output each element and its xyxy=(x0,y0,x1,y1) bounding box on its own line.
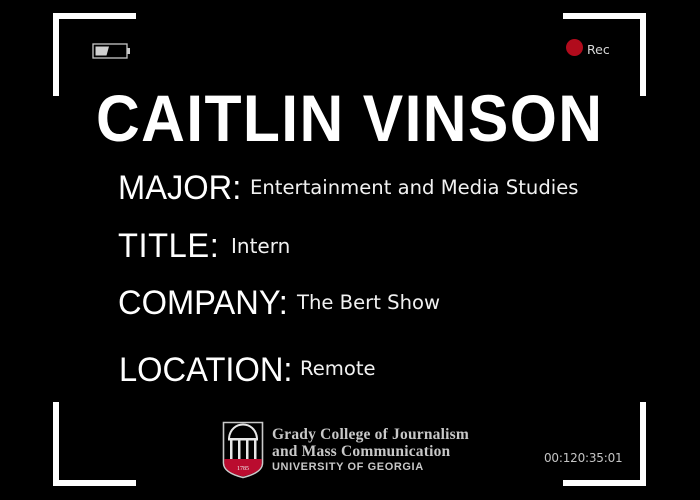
viewfinder corner: top right xyxy=(563,13,646,96)
viewfinder corner: bottom right xyxy=(563,402,646,486)
viewfinder corner: bottom left xyxy=(53,402,136,486)
label: location: LOCATION: xyxy=(119,351,293,389)
record label: Rec xyxy=(587,42,610,57)
value: company: The Bert Show xyxy=(297,291,440,314)
logo text: Grady College xyxy=(272,426,469,473)
logo: University of Georgia arch shield: 1785 xyxy=(237,466,249,472)
value: major: Entertainment and Media Studies xyxy=(250,176,578,199)
value: location: Remote xyxy=(300,357,376,380)
icon: record dot xyxy=(566,39,583,56)
title: CAITLIN VINSON xyxy=(96,81,603,155)
label: company: COMPANY: xyxy=(118,284,288,322)
timecode: 00:120:35:01 xyxy=(544,451,622,465)
logo line one: Grady College of Journalism xyxy=(272,426,469,443)
logo line two: and Mass Communication xyxy=(272,443,450,460)
icon: battery xyxy=(92,43,130,59)
logo: University of Georgia arch shield xyxy=(222,422,264,478)
value: title: Intern xyxy=(231,234,290,258)
logo line three: UNIVERSITY OF GEORGIA xyxy=(272,461,424,473)
label: major: MAJOR: xyxy=(118,169,241,207)
label: title: TITLE: xyxy=(118,227,219,265)
viewfinder corner: top left xyxy=(53,13,136,96)
